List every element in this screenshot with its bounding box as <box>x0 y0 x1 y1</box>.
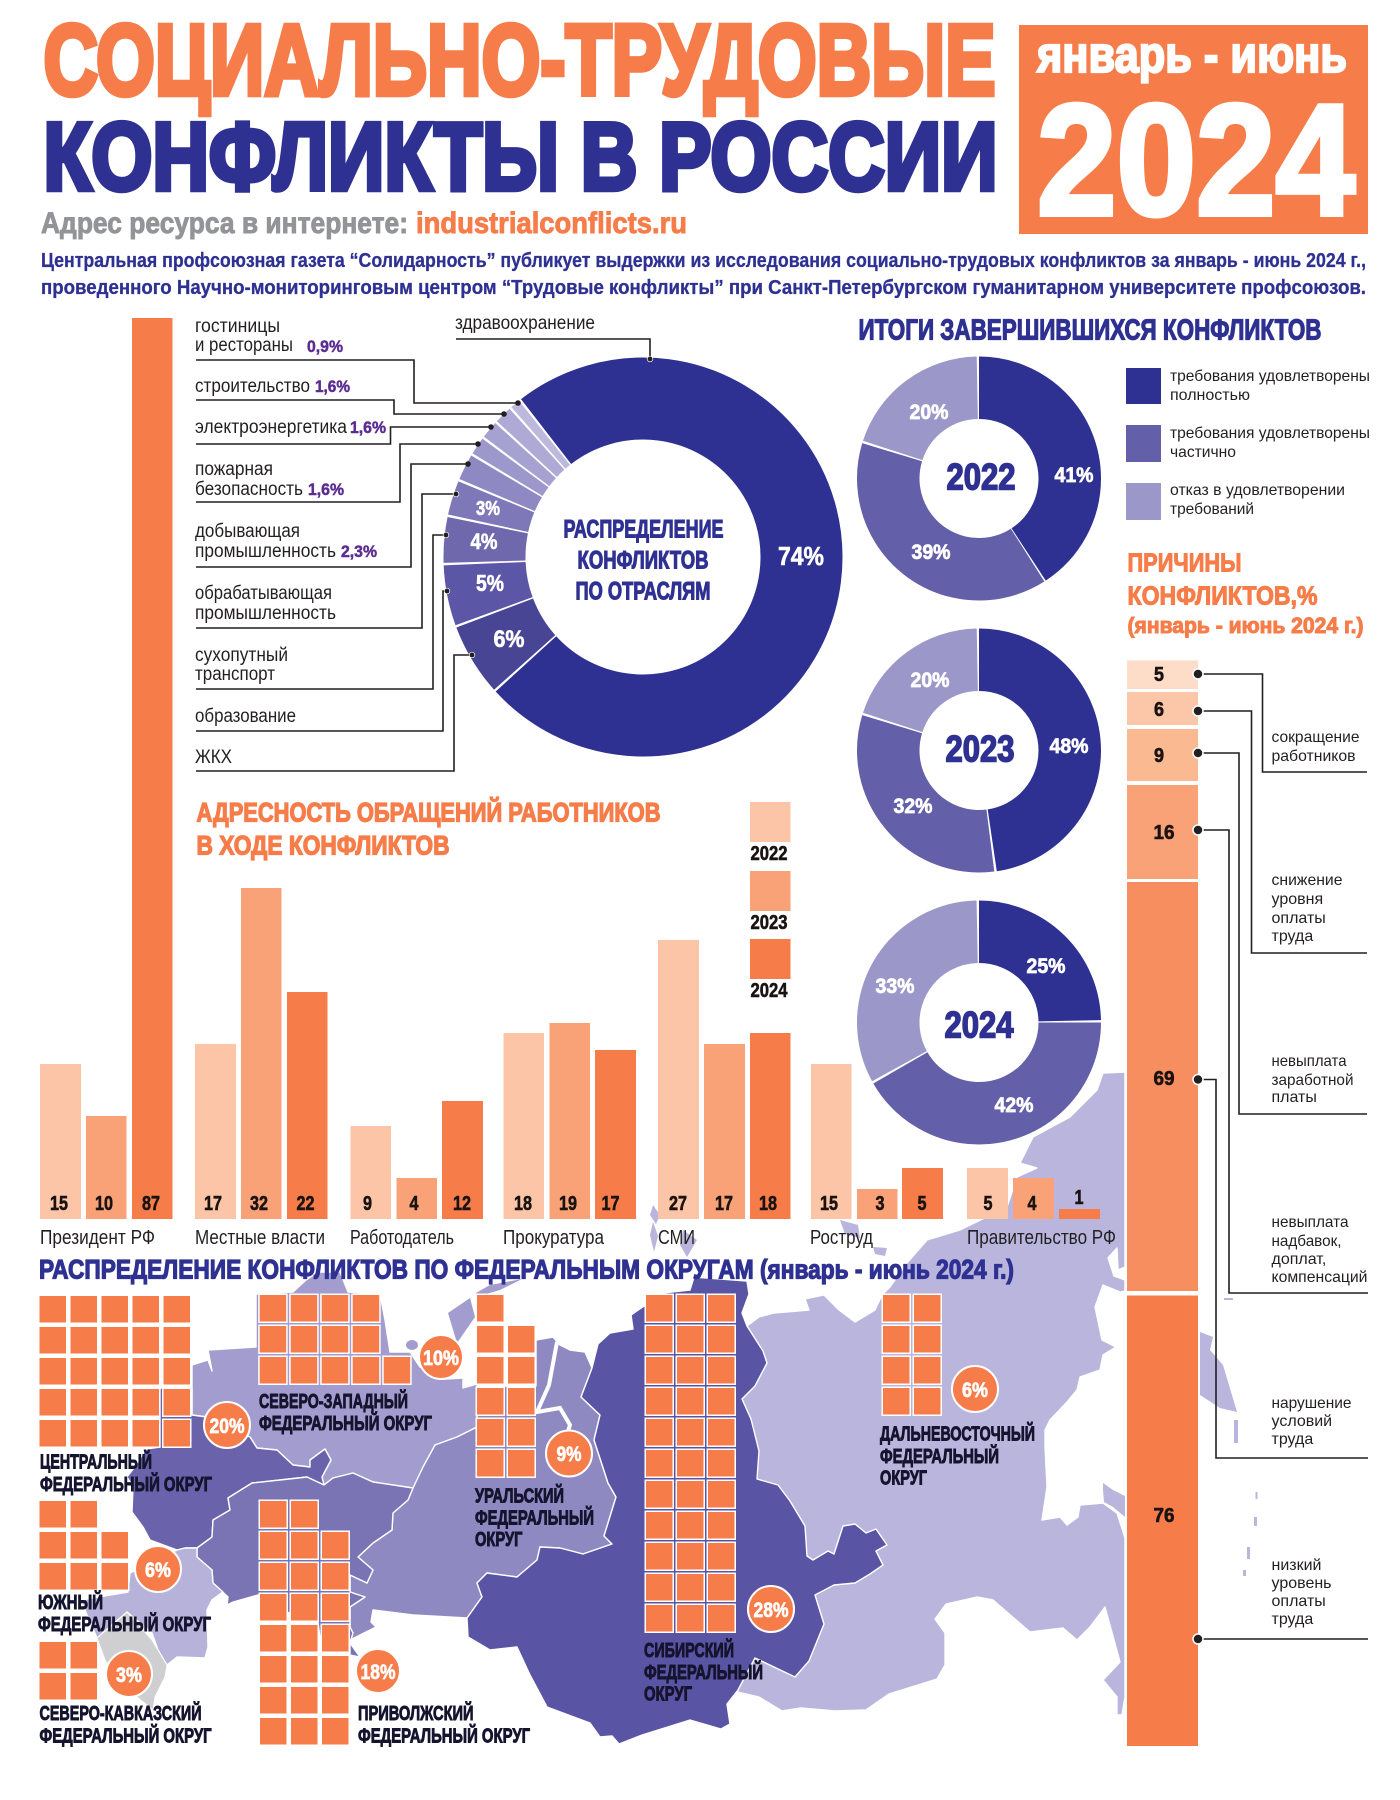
map: Kanin peninsula and islands <box>406 1279 522 1350</box>
bars group: Правительство РФ <box>967 1168 1100 1219</box>
district: Volga <box>260 1501 530 1748</box>
map: federal districts of Russia <box>81 1072 1258 1744</box>
donut chart: 2023 outcomes: 32% <box>894 795 933 818</box>
district: Far Eastern: ДАЛЬНЕВОСТОЧНЫЙ <box>880 1422 1035 1446</box>
callout: ЖКХ <box>195 652 475 771</box>
cause: снижение уровня оплаты труда <box>1272 872 1343 945</box>
date period: январь - июнь <box>1036 26 1347 83</box>
callout: сухопутный транспорт: транспорт <box>195 664 275 685</box>
bars group: Правительство РФ: 4 <box>1028 1193 1037 1215</box>
bars group: Роструд: 15 <box>820 1193 838 1215</box>
callout: электроэнергетика <box>195 417 494 444</box>
title line 2: КОНФЛИКТЫ В РОССИИ <box>44 104 998 210</box>
donut chart: 2022 outcomes <box>854 353 1104 604</box>
map: small arctic and pacific islands <box>650 1205 1258 1576</box>
causes stacked bar <box>1127 660 1198 1746</box>
district: Central: ЦЕНТРАЛЬНЫЙ <box>40 1450 152 1474</box>
causes heading: ПРИЧИНЫ <box>1128 548 1242 578</box>
bar chart heading: В ХОДЕ КОНФЛИКТОВ <box>196 830 450 860</box>
website address: industrialconflicts.ru <box>416 207 687 240</box>
bars group: Работодатель: 9 <box>363 1193 372 1215</box>
map region: Ural district <box>350 1337 616 1640</box>
donut chart: 2023 outcomes: 20% <box>910 669 950 692</box>
district: Ural: ФЕДЕРАЛЬНЫЙ <box>475 1506 594 1530</box>
title line 1: СОЦИАЛЬНО-ТРУДОВЫЕ <box>44 4 996 116</box>
donut centre label: РАСПРЕДЕЛЕНИЕ <box>564 516 724 544</box>
district: North Caucasus: ФЕДЕРАЛЬНЫЙ ОКРУГ <box>40 1724 212 1748</box>
donut percent labels: 6% <box>494 626 524 653</box>
callout: ЖКХ: ЖКХ <box>195 747 232 768</box>
bars group: Прокуратура: 18 <box>514 1193 532 1215</box>
website address: Адрес ресурса в интернете: <box>41 207 408 240</box>
callout: обрабатывающая промышленность: промышленность <box>195 603 336 624</box>
donut percent labels: 3% <box>476 498 500 520</box>
bar axis labels: Прокуратура <box>503 1227 605 1249</box>
district: Volga: 18% <box>360 1661 396 1684</box>
bar axis labels: СМИ <box>658 1227 695 1249</box>
cause: невыплата заработной платы <box>1272 1053 1354 1106</box>
year: 2024 <box>1037 72 1355 248</box>
donut chart: 2023 outcomes <box>865 636 1093 865</box>
cause: невыплата заработной платы: заработной <box>1272 1072 1354 1089</box>
cause: нарушение условий труда: нарушение <box>1272 1395 1352 1412</box>
causes heading <box>1128 548 1364 638</box>
bars group: Прокуратура: 17 <box>602 1193 620 1215</box>
cause: снижение уровня оплаты труда: оплаты <box>1272 910 1326 927</box>
callout: электроэнергетика: 1,6% <box>350 418 386 437</box>
district: Ural: УРАЛЬСКИЙ <box>475 1484 564 1508</box>
bars group: Роструд: 5 <box>918 1193 926 1215</box>
district: Southern: 6% <box>145 1559 171 1582</box>
callout: добывающая промышленность <box>195 461 471 567</box>
date badge <box>1019 25 1368 248</box>
map region: Far Eastern district <box>700 1072 1125 1715</box>
outcomes legend: требований <box>1170 501 1254 518</box>
district: Southern <box>38 1501 211 1636</box>
donut chart: 2022 outcomes: 39% <box>912 541 951 564</box>
bars group: Президент РФ: 15 <box>50 1193 68 1215</box>
cause: снижение уровня оплаты труда: труда <box>1272 928 1313 945</box>
callout: гостиницы и рестораны <box>195 316 521 406</box>
bar chart: addressees of workers' appeals <box>40 318 1116 1249</box>
cause: нарушение условий труда: условий <box>1272 1413 1332 1430</box>
connector dots <box>1193 669 1203 1644</box>
district: North-West: ФЕДЕРАЛЬНЫЙ ОКРУГ <box>259 1411 432 1435</box>
callout: пожарная безопасность <box>195 441 481 502</box>
district: Southern: ФЕДЕРАЛЬНЫЙ ОКРУГ <box>38 1612 211 1636</box>
callout: строительство: 1,6% <box>315 377 350 396</box>
donut centre label <box>564 516 724 606</box>
district: Southern: ЮЖНЫЙ <box>38 1590 103 1614</box>
bars group: Президент РФ <box>40 318 172 1219</box>
bar chart legend: 2023 <box>750 912 788 934</box>
donut percent labels: 74% <box>778 541 824 571</box>
causes stacked bar: 69 <box>1154 1068 1174 1090</box>
bar chart legend <box>750 802 790 1002</box>
outcomes legend <box>1126 368 1370 520</box>
cause: снижение уровня оплаты труда: снижение <box>1272 872 1343 889</box>
cause: невыплата надбавок: доплат, <box>1272 1251 1326 1268</box>
connector lines <box>1198 674 1368 1639</box>
district: Siberian: СИБИРСКИЙ <box>644 1638 734 1662</box>
cause: невыплата надбавок: надбавок, <box>1272 1233 1342 1250</box>
district: Siberian: 28% <box>754 1599 789 1622</box>
callout: сухопутный транспорт: сухопутный <box>195 645 288 666</box>
callout: строительство <box>195 376 507 417</box>
cause: нарушение условий труда <box>1272 1395 1352 1448</box>
donut chart: 2022 outcomes: 20% <box>910 401 949 424</box>
donut chart: 2022 outcomes: 41% <box>1054 464 1094 487</box>
bars group: Прокуратура: 19 <box>559 1193 577 1215</box>
cause: низкий уровень оплаты труда: оплаты <box>1272 1593 1326 1610</box>
outcomes legend: требования удовлетворены <box>1170 425 1370 442</box>
cause: нарушение условий труда: труда <box>1272 1431 1313 1448</box>
outcomes legend: требования удовлетворены <box>1170 368 1370 385</box>
causes stacked bar: 16 <box>1154 822 1174 844</box>
callout: образование <box>195 588 450 731</box>
bars group: СМИ: 27 <box>669 1193 687 1215</box>
district: North-West: СЕВЕРО-ЗАПАДНЫЙ <box>259 1389 408 1413</box>
bar chart heading: АДРЕСНОСТЬ ОБРАЩЕНИЙ РАБОТНИКОВ <box>196 796 660 828</box>
map region: Volga district <box>197 1473 413 1657</box>
causes stacked bar: 9 <box>1154 745 1164 767</box>
website address <box>41 207 687 240</box>
donut chart: 2022 outcomes: 2022 <box>946 456 1016 498</box>
donut chart: 2024 outcomes <box>855 898 1103 1146</box>
map heading: РАСПРЕДЕЛЕНИЕ КОНФЛИКТОВ ПО ФЕДЕРАЛЬНЫМ ОКРУГАМ (январь - июнь 2024 г.) <box>39 1254 1014 1284</box>
cause: невыплата надбавок: компенсаций <box>1272 1269 1368 1286</box>
causes callouts <box>1193 669 1368 1644</box>
bars group: Роструд: 3 <box>876 1193 884 1215</box>
district: Siberian: ОКРУГ <box>644 1684 692 1706</box>
cause: невыплата надбавок: невыплата <box>1272 1214 1349 1231</box>
donut chart: 2023 outcomes: 2023 <box>946 728 1014 770</box>
district: Ural: ОКРУГ <box>475 1529 522 1551</box>
map region: Siberian district <box>467 1277 887 1744</box>
industry callouts <box>195 313 653 771</box>
cause: сокращение работников: сокращение <box>1272 729 1360 746</box>
cause: низкий уровень оплаты труда: уровень <box>1272 1575 1332 1592</box>
map: Ob gulf <box>537 1342 570 1434</box>
cause: низкий уровень оплаты труда: труда <box>1272 1611 1313 1628</box>
bar axis labels: Местные власти <box>195 1227 325 1249</box>
bars group: СМИ: 17 <box>715 1193 733 1215</box>
bar axis labels: Работодатель <box>350 1227 454 1249</box>
district: North-West: 10% <box>423 1347 459 1370</box>
causes stacked bar: 76 <box>1154 1505 1174 1527</box>
district: Siberian <box>644 1295 794 1706</box>
cause: невыплата заработной платы: невыплата <box>1272 1053 1347 1070</box>
district: North Caucasus <box>40 1642 212 1748</box>
callout: гостиницы и рестораны: гостиницы <box>195 316 280 337</box>
cause: сокращение работников <box>1272 729 1360 765</box>
bars group: Правительство РФ: 1 <box>1074 1187 1084 1209</box>
district: Far Eastern: ОКРУГ <box>880 1468 927 1490</box>
donut chart: 2023 outcomes: 48% <box>1050 735 1089 758</box>
bars group: Президент РФ: 10 <box>95 1193 113 1215</box>
donut percent labels: 4% <box>470 529 498 554</box>
district: Far Eastern: ФЕДЕРАЛЬНЫЙ <box>880 1444 999 1468</box>
causes heading: КОНФЛИКТОВ,% <box>1128 580 1318 610</box>
bar chart heading <box>196 796 660 860</box>
donut chart: 2024 outcomes: 2024 <box>944 1004 1014 1046</box>
district: Volga: ПРИВОЛЖСКИЙ <box>358 1701 474 1725</box>
district: Far Eastern <box>880 1295 1035 1490</box>
district: Volga: ФЕДЕРАЛЬНЫЙ ОКРУГ <box>358 1724 530 1748</box>
outcomes legend: отказ в удовлетворении <box>1170 482 1345 499</box>
causes stacked bar: 6 <box>1154 699 1164 721</box>
donut percent labels <box>470 498 824 653</box>
bars group: Местные власти: 22 <box>296 1193 314 1215</box>
bar axis labels <box>40 1227 1116 1249</box>
district: Central <box>40 1296 250 1496</box>
district: North Caucasus: СЕВЕРО-КАВКАЗСКИЙ <box>40 1701 202 1725</box>
bar chart legend: 2022 <box>750 843 788 865</box>
cause: невыплата надбавок <box>1272 1214 1368 1286</box>
donut percent labels: 5% <box>476 570 504 596</box>
bars group: Прокуратура <box>504 1023 636 1219</box>
district: Central: ФЕДЕРАЛЬНЫЙ ОКРУГ <box>40 1472 212 1496</box>
callout: добывающая промышленность: 2,3% <box>341 542 377 561</box>
district: Ural <box>475 1295 594 1551</box>
donut centre label: КОНФЛИКТОВ <box>578 546 708 574</box>
cause: сокращение работников: работников <box>1272 748 1356 765</box>
donut chart: 2024 outcomes: 42% <box>994 1094 1034 1117</box>
map region: North-West district <box>192 1272 477 1488</box>
cause: невыплата заработной платы: платы <box>1272 1089 1317 1106</box>
callout: образование: образование <box>195 706 296 727</box>
callout: пожарная безопасность: пожарная <box>195 459 273 480</box>
district: North Caucasus: 3% <box>116 1664 142 1687</box>
bars group: Работодатель: 4 <box>410 1193 419 1215</box>
bars group: Роструд <box>811 1064 943 1219</box>
district: Ural: 9% <box>556 1443 582 1466</box>
bar axis labels: Президент РФ <box>40 1227 155 1249</box>
cause: низкий уровень оплаты труда <box>1272 1557 1332 1628</box>
bars group: Местные власти: 32 <box>250 1193 268 1215</box>
bars group: Работодатель: 12 <box>453 1193 471 1215</box>
donut chart: 2024 outcomes: 25% <box>1026 955 1066 978</box>
outcomes legend: полностью <box>1170 387 1250 404</box>
bar axis labels: Роструд <box>810 1227 873 1249</box>
callout: гостиницы и рестораны: 0,9% <box>307 337 343 356</box>
cause: низкий уровень оплаты труда: низкий <box>1272 1557 1321 1574</box>
donut centre label: ПО ОТРАСЛЯМ <box>576 578 710 606</box>
bars group: Местные власти: 17 <box>204 1193 222 1215</box>
callout: добывающая промышленность: промышленность <box>195 541 336 562</box>
callout: обрабатывающая промышленность <box>195 491 459 628</box>
cause: снижение уровня оплаты труда: уровня <box>1272 891 1323 908</box>
callout: обрабатывающая промышленность: обрабатывающая <box>195 583 332 604</box>
callout: пожарная безопасность: 1,6% <box>308 480 344 499</box>
callout: здравоохранение: здравоохранение <box>455 313 595 334</box>
callout: здравоохранение <box>455 313 653 362</box>
callout: добывающая промышленность: добывающая <box>195 521 300 542</box>
donut chart: conflicts by industry <box>419 333 867 781</box>
district: Central: 20% <box>210 1415 245 1438</box>
callout: гостиницы и рестораны: и рестораны <box>195 335 293 356</box>
callout: электроэнергетика: электроэнергетика <box>195 417 347 438</box>
causes stacked bar: 5 <box>1154 664 1164 686</box>
bars group: Местные власти <box>195 888 328 1219</box>
intro text <box>41 250 1366 299</box>
bars group: Президент РФ: 87 <box>142 1193 160 1215</box>
callout: строительство: строительство <box>195 376 310 397</box>
district: Siberian: ФЕДЕРАЛЬНЫЙ <box>644 1660 763 1684</box>
bar axis labels: Правительство РФ <box>967 1227 1116 1249</box>
bar chart legend: 2024 <box>750 980 788 1002</box>
outcomes legend: частично <box>1170 444 1236 461</box>
district: Far Eastern: 6% <box>962 1379 988 1402</box>
callout: пожарная безопасность: безопасность <box>195 479 303 500</box>
map region: Southern district <box>81 1548 223 1665</box>
district: North-West <box>259 1295 463 1435</box>
donut chart: 2024 outcomes: 33% <box>876 975 915 998</box>
map region: Central district <box>127 1388 331 1550</box>
callout: сухопутный транспорт <box>195 532 449 689</box>
map: Kamchatka <box>1200 1332 1237 1412</box>
causes heading: (январь - июнь 2024 г.) <box>1128 613 1364 638</box>
bars group: Правительство РФ: 5 <box>984 1193 992 1215</box>
bars group: СМИ: 18 <box>759 1193 777 1215</box>
bars group: СМИ <box>658 940 790 1219</box>
map region: North Caucasus district <box>97 1612 167 1710</box>
map: northern peninsula of the far east inlet <box>1103 1483 1125 1517</box>
bars group: Работодатель <box>350 1101 483 1219</box>
